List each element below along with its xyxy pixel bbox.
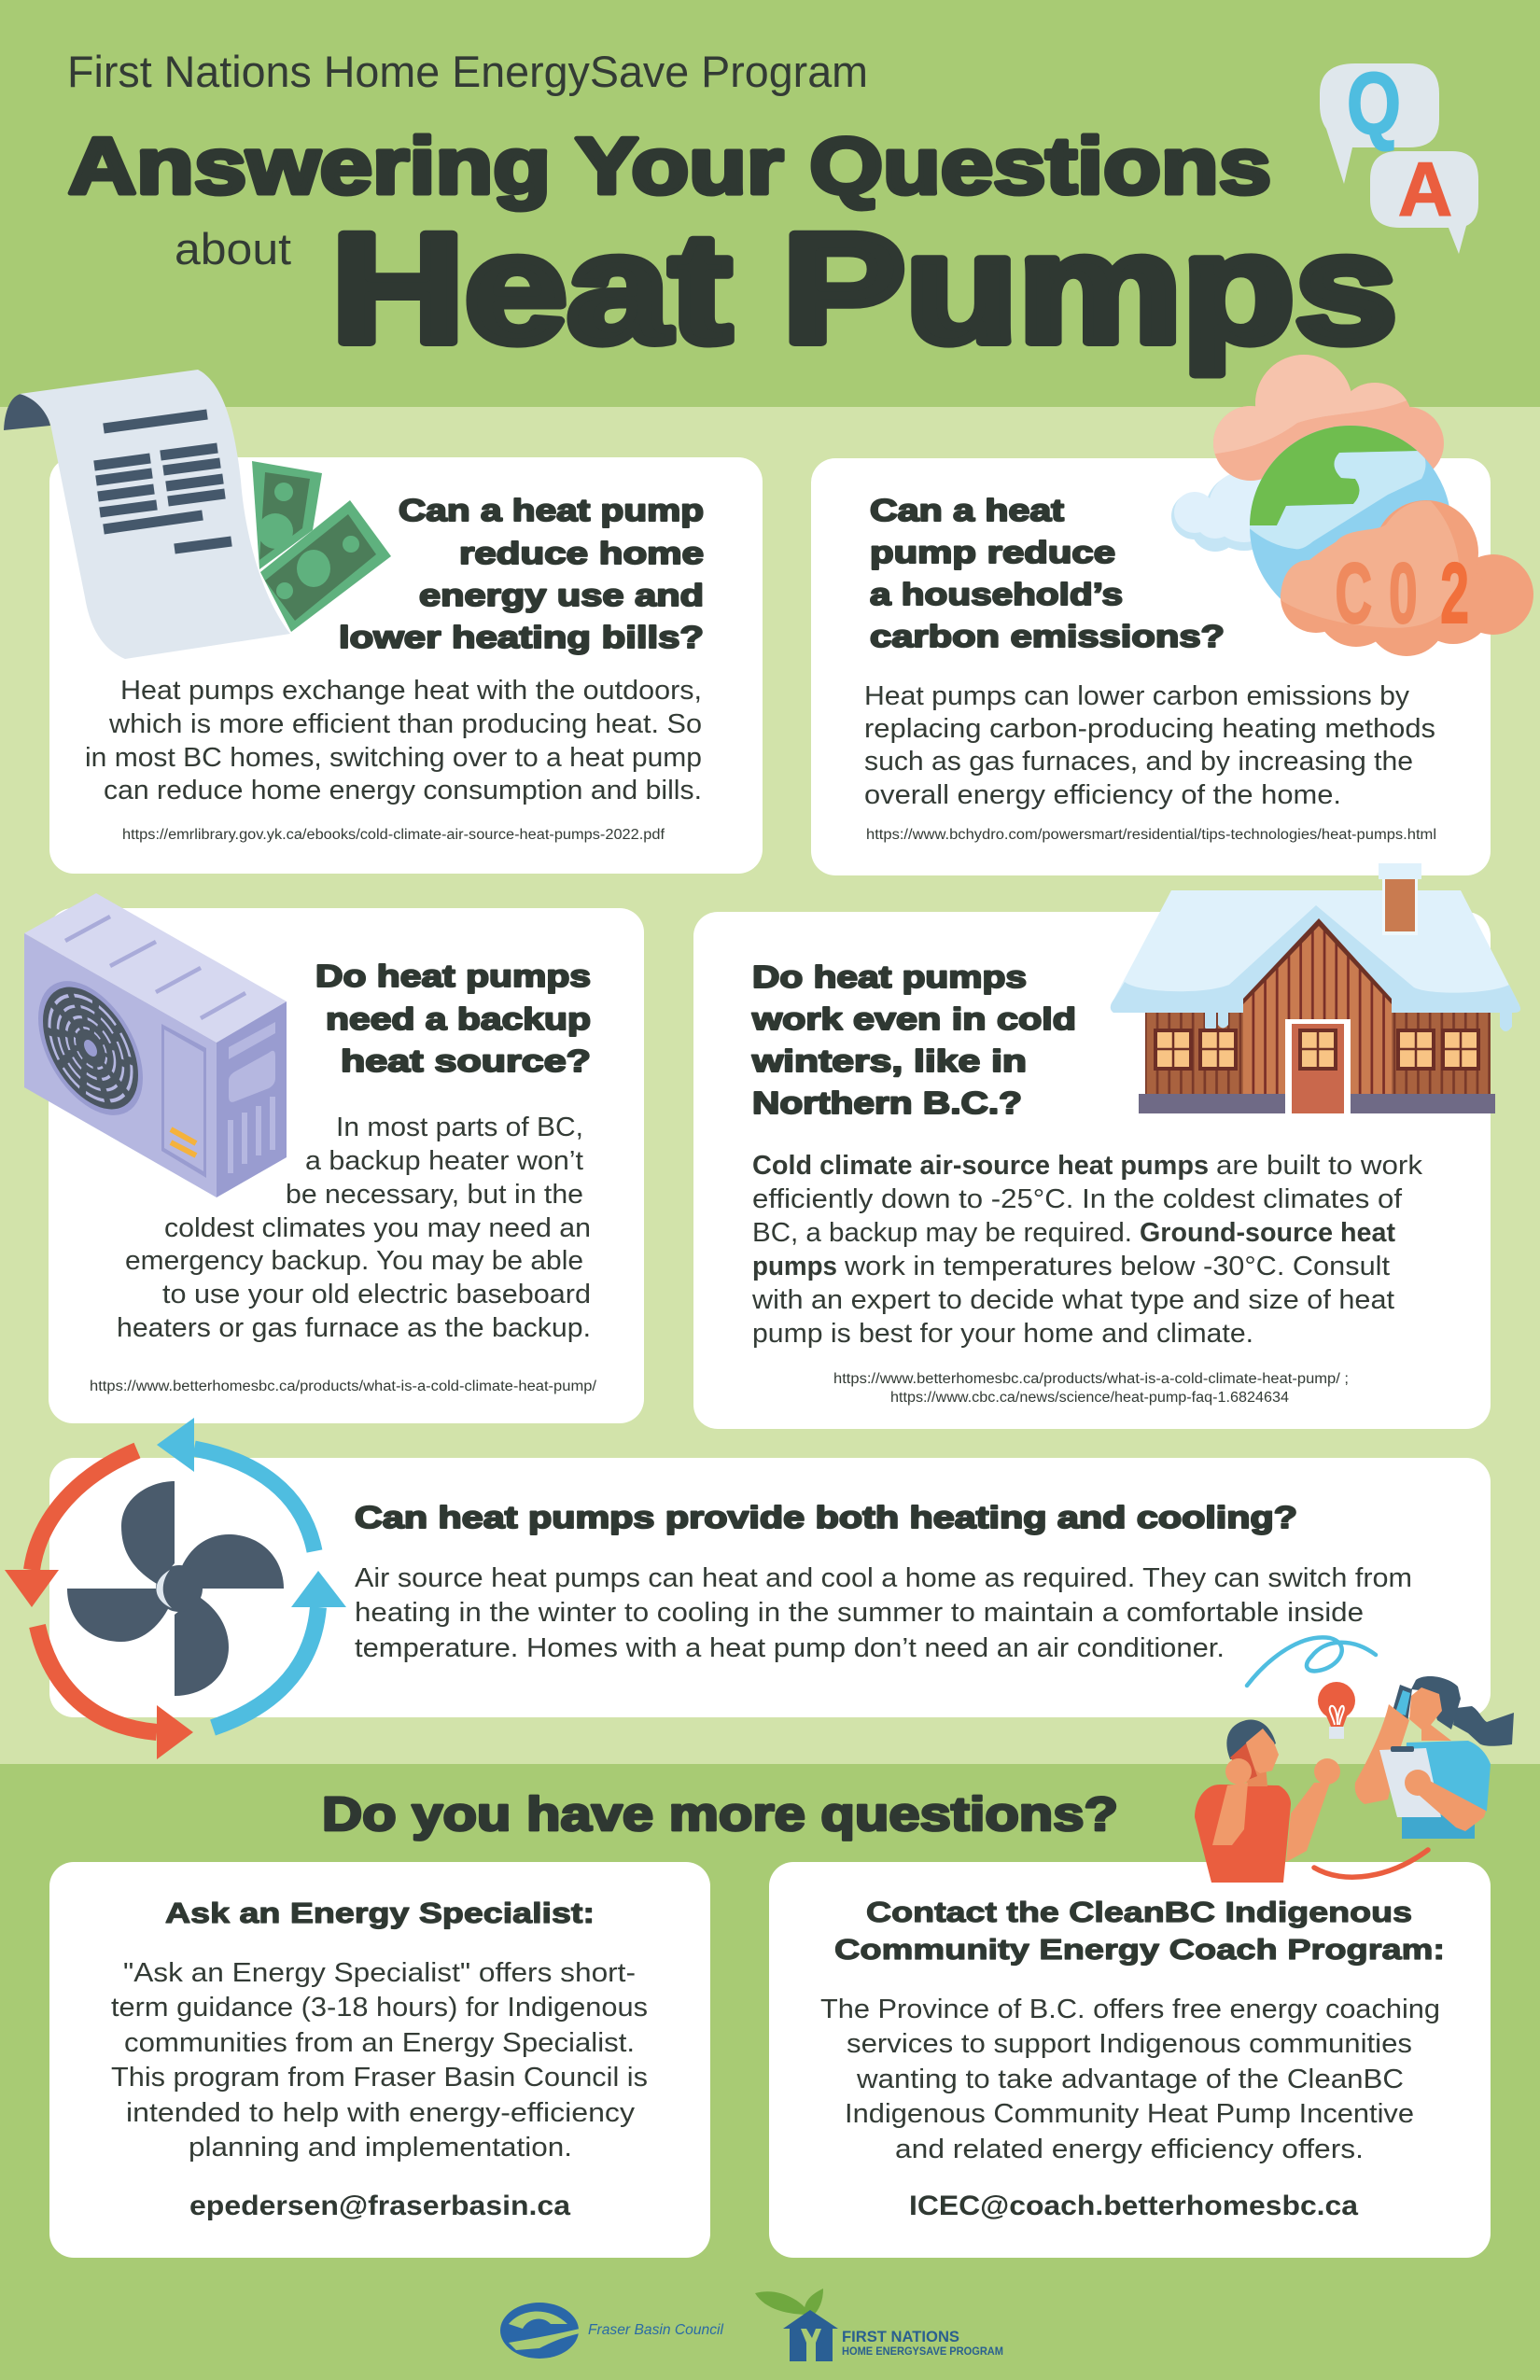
logo: Fraser Basin Council <box>500 2303 724 2359</box>
body text: such as gas furnaces, and by increasing the <box>864 747 1413 777</box>
panel: energy bills <box>49 457 763 874</box>
body text: The Province of B.C. offers free energy coaching <box>820 1995 1440 2024</box>
heading: Contact the CleanBC Indigenous <box>866 1896 1412 1928</box>
heading <box>751 959 1076 1120</box>
body text: Heat pumps can lower carbon emissions by <box>864 681 1410 711</box>
icon: fan with heating and cooling arrows <box>5 1418 346 1759</box>
leaves <box>755 2289 823 2317</box>
icon: Q and A speech bubbles: A <box>1398 147 1452 232</box>
header band <box>0 0 1540 407</box>
body text <box>751 1151 1423 1349</box>
light green middle band <box>0 407 1540 1764</box>
body text: overall energy efficiency of the home. <box>864 780 1341 810</box>
illustration: two people with a lightbulb <box>1195 1637 1514 1883</box>
heading: a household’s <box>870 577 1123 611</box>
body text: Cold climate air-source heat pumps <box>752 1151 1209 1181</box>
section heading: more questions: Do you have more questions? <box>322 1787 1118 1841</box>
panel: ask an energy specialist <box>49 1862 710 2258</box>
body text: Ground-source heat <box>1140 1218 1396 1248</box>
body text: heaters or gas furnace as the backup. <box>117 1313 591 1343</box>
body text <box>117 1113 591 1343</box>
heading <box>339 493 704 654</box>
heading: winters, like in <box>751 1043 1027 1078</box>
heading: Ask an Energy Specialist: <box>165 1897 595 1929</box>
heading: carbon emissions? <box>870 619 1225 653</box>
panel: cold winters <box>693 912 1491 1429</box>
heading: Northern B.C.? <box>752 1085 1022 1120</box>
lightbulb <box>1318 1682 1355 1739</box>
heading: need a backup <box>326 1001 591 1036</box>
body text: which is more efficient than producing heat. So <box>108 709 702 739</box>
icon: CO2 clouds and globe <box>1171 355 1533 656</box>
upper peach cloud <box>1213 355 1444 481</box>
header <box>67 47 1397 375</box>
body text: heating in the winter to cooling in the summer to maintain a comfortable inside <box>355 1598 1364 1628</box>
cooling arrows <box>157 1418 346 1728</box>
body text: Indigenous Community Heat Pump Incentive <box>845 2099 1414 2129</box>
program name <box>842 2328 1003 2358</box>
globe <box>1250 426 1449 599</box>
body text: pump is best for your home and climate. <box>752 1319 1253 1349</box>
body text: can reduce home energy consumption and bills. <box>104 776 702 805</box>
icon: Q and A speech bubbles: Q <box>1347 54 1401 152</box>
icon: snowy house <box>1111 863 1520 1117</box>
panel: energy coach program <box>769 1862 1491 2258</box>
house mark <box>783 2310 838 2361</box>
heading <box>315 959 591 1078</box>
body text <box>355 1563 1412 1663</box>
body text: wanting to take advantage of the CleanBC <box>856 2065 1404 2094</box>
body text: in most BC homes, switching over to a heat pump <box>85 743 702 773</box>
body text: be necessary, but in the <box>286 1180 583 1210</box>
CO2 cloud <box>1281 500 1533 656</box>
name: Fraser Basin Council <box>588 2322 724 2338</box>
emblem <box>500 2303 580 2359</box>
body text: temperature. Homes with a heat pump don’t need an air conditioner. <box>355 1633 1225 1663</box>
body text: BC, a backup may be required. <box>752 1218 1132 1248</box>
body text <box>85 676 702 805</box>
body text: emergency backup. You may be able <box>125 1246 583 1276</box>
program name: HOME ENERGYSAVE PROGRAM <box>842 2345 1003 2358</box>
body text: communities from an Energy Specialist. <box>124 2028 635 2058</box>
panel: heating and cooling <box>49 1458 1491 1717</box>
heading: energy use and <box>419 578 704 612</box>
icon: outdoor heat pump unit <box>24 893 287 1197</box>
heading: heat source? <box>341 1043 591 1078</box>
program name: FIRST NATIONS <box>842 2328 959 2345</box>
body text: coldest climates you may need an <box>164 1213 591 1243</box>
body text: planning and implementation. <box>189 2133 572 2163</box>
card background <box>693 912 1491 1429</box>
program name: First Nations Home EnergySave Program <box>67 47 868 96</box>
source link: https://www.betterhomesbc.ca/products/what-is-a-cold-climate-heat-pump/ <box>90 1379 597 1394</box>
source link: https://emrlibrary.gov.yk.ca/ebooks/cold-climate-air-source-heat-pumps-2022.pdf <box>122 827 665 843</box>
fan blades <box>67 1481 284 1696</box>
heading: Do heat pumps <box>315 959 591 993</box>
email: ICEC@coach.betterhomesbc.ca <box>909 2191 1358 2221</box>
panel: backup heat <box>49 908 644 1423</box>
heading <box>870 493 1225 653</box>
heading: lower heating bills? <box>339 620 704 654</box>
body text: and related energy efficiency offers. <box>895 2135 1364 2164</box>
body text: replacing carbon-producing heating methods <box>864 714 1435 744</box>
man <box>1195 1719 1340 1883</box>
source links: https://www.cbc.ca/news/science/heat-pump-faq-1.6824634 <box>890 1390 1289 1406</box>
body text: term guidance (3-18 hours) for Indigenous <box>111 1993 648 2023</box>
heading: Can heat pumps provide both heating and cooling? <box>355 1500 1297 1534</box>
body text: "Ask an Energy Specialist" offers short- <box>123 1958 636 1988</box>
footer band <box>0 1764 1540 2380</box>
logo: First Nations Home EnergySave Program <box>755 2289 1003 2361</box>
body text <box>864 681 1435 810</box>
heading: Can a heat pump <box>399 493 704 527</box>
body text: Heat pumps exchange heat with the outdoors, <box>120 676 702 706</box>
about: about <box>175 224 291 273</box>
card background <box>49 1458 1491 1717</box>
source links: https://www.betterhomesbc.ca/products/what-is-a-cold-climate-heat-pump/ ; <box>833 1371 1349 1387</box>
body text: pumps <box>752 1252 837 1281</box>
body text: to use your old electric baseboard <box>162 1280 591 1309</box>
body text: work in temperatures below -30°C. Consult <box>844 1252 1390 1281</box>
body text <box>820 1995 1440 2164</box>
card background <box>811 458 1491 875</box>
panel: carbon emissions <box>811 458 1491 875</box>
body text: In most parts of BC, <box>336 1113 583 1142</box>
body text <box>111 1958 648 2163</box>
card background <box>49 457 763 874</box>
icon: bill and money <box>4 370 391 659</box>
body text: Air source heat pumps can heat and cool a home as required. They can switch from <box>355 1563 1412 1593</box>
body text: services to support Indigenous communities <box>847 2029 1412 2059</box>
body text: intended to help with energy-efficiency <box>126 2098 636 2128</box>
heading <box>834 1896 1445 1966</box>
heating arrows <box>5 1450 193 1759</box>
title line two: Heat Pumps <box>331 203 1397 375</box>
title line one: Answering Your Questions <box>68 122 1271 211</box>
body text: are built to work <box>1216 1151 1423 1181</box>
CO2 cloud: C0 2 <box>1335 546 1469 642</box>
heading: Can a heat <box>870 493 1064 527</box>
body text: a backup heater won’t <box>305 1146 583 1176</box>
card background <box>769 1862 1491 2258</box>
body text: efficiently down to -25°C. In the coldest climates of <box>752 1184 1402 1214</box>
heading: work even in cold <box>751 1001 1076 1036</box>
card background <box>49 1862 710 2258</box>
icon: Q and A speech bubbles <box>1320 54 1478 254</box>
heading: Community Energy Coach Program: <box>834 1933 1445 1966</box>
body text: This program from Fraser Basin Council is <box>111 2063 648 2093</box>
card background <box>49 908 644 1423</box>
woman <box>1355 1676 1514 1839</box>
heading: pump reduce <box>870 535 1115 569</box>
heading: reduce home <box>459 536 704 570</box>
source link: https://www.bchydro.com/powersmart/residential/tips-technologies/heat-pumps.html <box>866 827 1436 843</box>
small blue cloud <box>1171 471 1283 552</box>
source links <box>833 1371 1349 1406</box>
body text: with an expert to decide what type and size of heat <box>751 1285 1394 1315</box>
email: epedersen@fraserbasin.ca <box>189 2191 570 2221</box>
heading: Do heat pumps <box>752 959 1027 994</box>
